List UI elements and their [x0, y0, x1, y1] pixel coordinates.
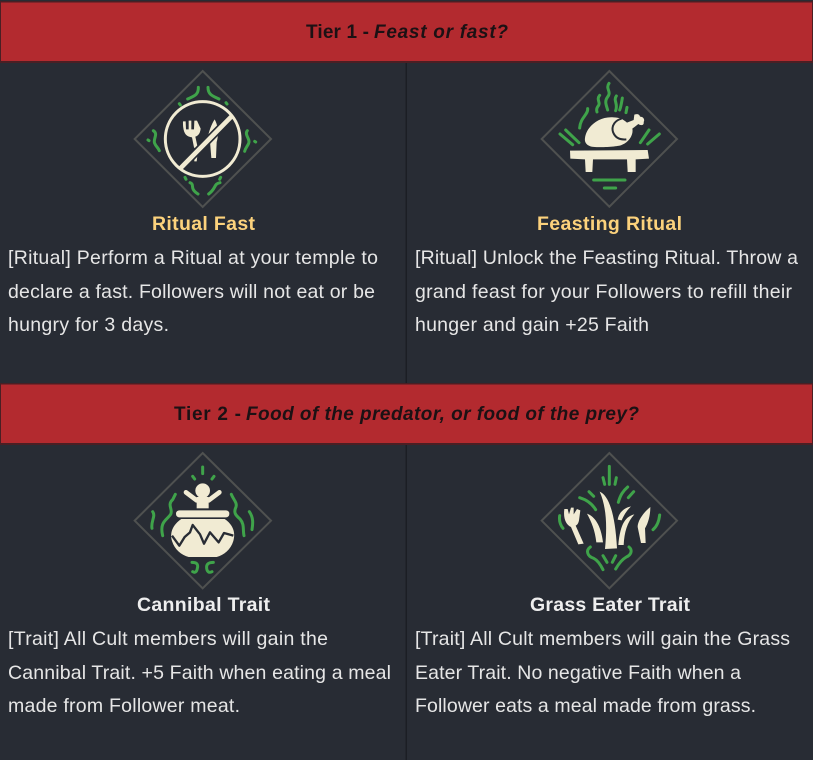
- tier 2 header: Food of the predator, or food of the prey?: [246, 404, 639, 425]
- panel: feasting ritual: [415, 71, 798, 336]
- description: [415, 247, 798, 336]
- description: [8, 628, 391, 717]
- title: Grass Eater Trait: [530, 594, 690, 616]
- icon: roast feast: [542, 71, 677, 207]
- icon: cannibal pot: [135, 453, 271, 588]
- title: Ritual Fast: [152, 213, 256, 235]
- tier 2 header: Tier 2 -: [174, 404, 241, 425]
- tier 2 header: [0, 383, 813, 445]
- description: Follower eats a meal made from grass.: [415, 695, 756, 717]
- description: [415, 628, 790, 717]
- panel: ritual fast: [8, 71, 378, 336]
- title: Cannibal Trait: [137, 594, 270, 616]
- description: Eater Trait. No negative Faith when a: [415, 662, 741, 684]
- description: [Ritual] Unlock the Feasting Ritual. Throw a: [415, 247, 798, 269]
- panel: grass eater trait: [415, 453, 790, 717]
- description: declare a fast. Followers will not eat or be: [8, 281, 375, 303]
- description: hunger and gain +25 Faith: [415, 314, 649, 336]
- tier 1 header: [0, 1, 813, 63]
- tier 1 header: Tier 1 -: [306, 22, 369, 43]
- title: Feasting Ritual: [537, 213, 682, 235]
- description: [Ritual] Perform a Ritual at your temple to: [8, 247, 378, 269]
- description: grand feast for your Followers to refill their: [415, 281, 792, 303]
- icon: grass and cutlery: [542, 453, 677, 588]
- panel: cannibal trait: [8, 453, 391, 717]
- tier 1 header: Feast or fast?: [374, 22, 508, 43]
- description: made from Follower meat.: [8, 695, 240, 717]
- description: [Trait] All Cult members will gain the Grass: [415, 628, 790, 650]
- description: hungry for 3 days.: [8, 314, 169, 336]
- icon: no eating: [135, 71, 271, 207]
- description: [Trait] All Cult members will gain the: [8, 628, 328, 650]
- description: [8, 247, 378, 336]
- description: Cannibal Trait. +5 Faith when eating a meal: [8, 662, 391, 684]
